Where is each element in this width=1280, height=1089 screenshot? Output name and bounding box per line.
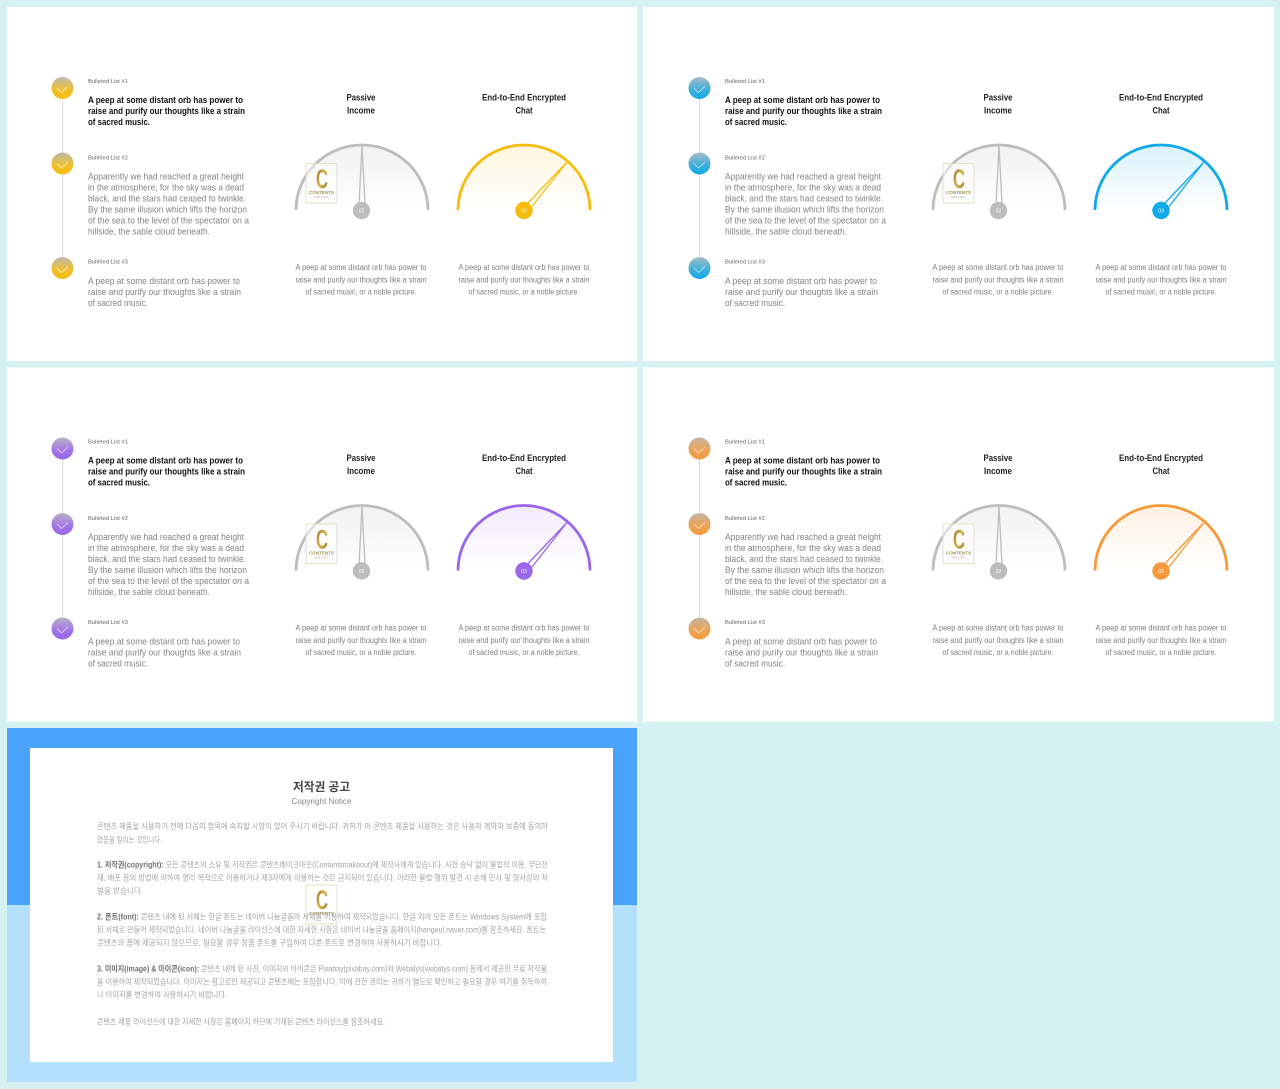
text block: bulleted list: black, and the stars had ceased to twinkle. bbox=[88, 194, 246, 204]
text block: bulleted list: Bulleted List #2 bbox=[88, 156, 128, 162]
gauge: passive income bbox=[296, 92, 428, 296]
text block: bulleted list: of sacred music. bbox=[88, 117, 150, 128]
timeline with three check bullets bbox=[52, 77, 74, 279]
gauge: passive income: of sacred music, or a noble picture. bbox=[942, 288, 1054, 296]
panel: orange slide bbox=[643, 368, 1274, 722]
text block: bulleted list: A peep at some distant orb has power to bbox=[88, 456, 243, 466]
text block: notice intro: 였음을 알리는 것입니다. bbox=[97, 834, 162, 844]
text block: font clause: 콘텐츠의 폼에 제공되지 않으므로, 필요할 경우 정품 폰트를 구입하여 다른 폰트로 변경하여 사용하시기 바랍니다. bbox=[97, 938, 442, 948]
text block: bulleted list: A peep at some distant orb has power to bbox=[725, 276, 877, 287]
gauge: passive income: 02 bbox=[359, 208, 364, 214]
text block: bulleted list: By the same illusion which lifts the horizon bbox=[88, 565, 247, 576]
gauge: passive income bbox=[932, 92, 1065, 296]
text block: font clause bbox=[97, 912, 548, 948]
gauge: passive income: A peep at some distant orb has power to bbox=[296, 263, 427, 272]
timeline with three check bullets bbox=[688, 77, 710, 279]
text block: bulleted list: Bulleted List #3 bbox=[725, 620, 765, 626]
text block: bulleted list: of sacred music. bbox=[88, 298, 148, 309]
text block: bulleted list bbox=[88, 440, 250, 670]
text block: bulleted list: of sacred music. bbox=[725, 117, 787, 128]
gauge: encrypted chat: raise and purify our thoughts like a strain bbox=[458, 636, 590, 645]
gauge: encrypted chat bbox=[458, 453, 590, 657]
text block: bulleted list: hillside, the sable cloud beneath. bbox=[88, 587, 210, 598]
text block: bulleted list bbox=[725, 440, 887, 670]
heading: copyright notice bbox=[292, 779, 352, 806]
gauge: passive income: of sacred music, or a noble picture. bbox=[306, 648, 416, 657]
text block: bulleted list: raise and purify our thoughts like a strain bbox=[725, 648, 878, 658]
text block: copyright clause: 재, 배포 등의 방법에 의하여 영리 목적으로 이용하거나 제3자에게 이용하는 것은 금지되어 있습니다. 이러한 불법 행위 발견 시 손해 민사 및 형사상의 처 bbox=[97, 872, 548, 882]
text block: bulleted list: black, and the stars had ceased to twinkle. bbox=[725, 554, 883, 565]
gauge: passive income: 02 bbox=[359, 569, 364, 575]
text block: bulleted list: in the atmosphere, for the sky was a dead bbox=[88, 182, 244, 194]
gauge: passive income: of sacred music, or a noble picture. bbox=[306, 288, 416, 296]
gauge: encrypted chat: of sacred music, or a noble picture. bbox=[1106, 288, 1216, 296]
icon: contents logo watermark: REAL COPY bbox=[314, 556, 329, 560]
heading: copyright notice: Copyright Notice bbox=[292, 796, 352, 806]
gauge: passive income bbox=[296, 453, 428, 657]
text block: bulleted list: A peep at some distant orb has power to bbox=[88, 276, 240, 287]
icon: contents logo watermark bbox=[943, 524, 974, 564]
text block: bulleted list: Bulleted List #1 bbox=[725, 79, 765, 85]
gauge: encrypted chat: of sacred music, or a noble picture. bbox=[468, 288, 580, 296]
icon: contents logo watermark: CONTENTS bbox=[946, 550, 971, 556]
text block: bulleted list: of sacred music. bbox=[725, 658, 785, 670]
gauge: encrypted chat: A peep at some distant orb has power to bbox=[458, 624, 590, 632]
gauge: passive income: raise and purify our thoughts like a strain bbox=[296, 636, 426, 645]
gauge: passive income: Income bbox=[347, 106, 375, 116]
icon: contents logo watermark: C bbox=[953, 164, 965, 194]
gauge: passive income: Income bbox=[984, 466, 1012, 476]
gauge: encrypted chat: raise and purify our thoughts like a strain bbox=[458, 276, 590, 284]
text block: bulleted list: in the atmosphere, for the sky was a dead bbox=[725, 543, 881, 554]
text block: image and icon clause: 3. 이미지(image) & 아이콘(icon): 콘텐츠 내에 된 사진, 이미지와 아이콘은 Pixabay(pixabay.com)와 Webalys(webalys.com) 등에서 제공한 무료 저작물 bbox=[97, 964, 547, 974]
text block: copyright clause: 1. 저작권(copyright): 모든 콘텐츠의 소유 및 저작권은 콘텐츠메이크아웃(Contentsmakeout)에 제작사에게 있습니다. 사전 승낙 없이 불법적 이용, 무단전 bbox=[97, 860, 548, 870]
text block: notice intro: 콘텐츠 제품을 사용하기 전에 다음의 항목에 숙지할 사항이 있어 주시기 바랍니다. 귀하가 이 콘텐츠 제품을 사용하는 것은 사용자 계약과 보증에 동의하 bbox=[97, 821, 549, 831]
text block: bulleted list: of sacred music. bbox=[88, 658, 148, 670]
text block: bulleted list: hillside, the sable cloud beneath. bbox=[725, 226, 847, 238]
gauge: passive income: raise and purify our thoughts like a strain bbox=[932, 276, 1064, 284]
text block: bulleted list: Bulleted List #2 bbox=[725, 516, 765, 522]
text block: bulleted list: in the atmosphere, for the sky was a dead bbox=[725, 182, 881, 194]
panel: blue slide bbox=[643, 7, 1274, 361]
text block: bulleted list: Apparently we had reached a great height bbox=[725, 532, 881, 543]
icon: contents logo watermark bbox=[306, 524, 337, 564]
gauge: encrypted chat: 03 bbox=[1158, 208, 1164, 214]
text block: bulleted list: raise and purify our thoughts like a strain bbox=[725, 466, 882, 478]
heading: copyright notice: 저작권 공고 bbox=[293, 779, 350, 794]
gauge: encrypted chat: End-to-End Encrypted bbox=[1119, 453, 1203, 463]
text block: bulleted list: of the sea to the level of the spectator on a bbox=[88, 216, 250, 226]
icon: contents logo watermark: CONTENTS bbox=[309, 911, 334, 916]
gauge: encrypted chat: A peep at some distant orb has power to bbox=[458, 263, 590, 272]
gauge: passive income: Income bbox=[347, 466, 375, 476]
text block: bulleted list: Apparently we had reached a great height bbox=[88, 172, 244, 182]
gauge: passive income: A peep at some distant orb has power to bbox=[932, 624, 1064, 632]
icon: contents logo watermark: CONTENTS bbox=[309, 550, 334, 556]
text block: bulleted list bbox=[88, 79, 250, 309]
text block: notice intro bbox=[97, 821, 549, 844]
text block: bulleted list bbox=[725, 79, 887, 309]
icon: contents logo watermark: C bbox=[316, 164, 328, 194]
text block: bulleted list: black, and the stars had ceased to twinkle. bbox=[88, 554, 246, 565]
text block: bulleted list: Apparently we had reached a great height bbox=[88, 532, 244, 543]
text block: bulleted list: A peep at some distant orb has power to bbox=[88, 95, 243, 106]
gauge: passive income: Passive bbox=[346, 92, 376, 102]
gauge: passive income: A peep at some distant orb has power to bbox=[296, 624, 427, 632]
text block: bulleted list: of sacred music. bbox=[725, 298, 785, 309]
gauge: encrypted chat: raise and purify our thoughts like a strain bbox=[1096, 636, 1226, 645]
text block: bulleted list: Bulleted List #2 bbox=[725, 156, 765, 162]
gauge: encrypted chat: Chat bbox=[516, 466, 533, 476]
timeline with three check bullets bbox=[52, 438, 74, 640]
text block: bulleted list: raise and purify our thoughts like a strain bbox=[88, 648, 241, 658]
text block: font clause: 된 서체로 만들어 제작되었습니다. 네이버 나눔글꼴 라이선스에 대한 자세한 사항은 네이버 나눔글꼴 홈페이지(hangeul.naver.com)를 참조하세요. 폰트는 bbox=[97, 924, 546, 934]
text block: bulleted list: of the sea to the level of the spectator on a bbox=[88, 576, 250, 587]
text block: bulleted list: raise and purify our thoughts like a strain bbox=[88, 287, 241, 298]
gauge: encrypted chat: End-to-End Encrypted bbox=[482, 453, 566, 463]
text block: bulleted list: A peep at some distant orb has power to bbox=[725, 456, 880, 466]
text block: bulleted list: By the same illusion which lifts the horizon bbox=[725, 204, 884, 216]
text block: bulleted list: Bulleted List #1 bbox=[88, 79, 128, 85]
text block: bulleted list: Bulleted List #1 bbox=[725, 440, 765, 446]
gauge: passive income: raise and purify our thoughts like a strain bbox=[296, 276, 426, 284]
icon: contents logo watermark: C bbox=[953, 524, 965, 554]
text block: bulleted list: Apparently we had reached a great height bbox=[725, 172, 881, 182]
gauge: encrypted chat: 03 bbox=[521, 569, 527, 575]
text block: bulleted list: hillside, the sable cloud beneath. bbox=[88, 226, 210, 238]
icon: contents logo watermark: REAL COPY bbox=[951, 556, 966, 560]
timeline with three check bullets bbox=[688, 438, 710, 640]
gauge: encrypted chat: 03 bbox=[1158, 569, 1164, 575]
text block: image and icon clause: 나 이미지를 변경하여 사용하시기 바랍니다. bbox=[97, 990, 227, 1000]
icon: contents logo watermark bbox=[306, 885, 337, 924]
text block: bulleted list: Bulleted List #1 bbox=[88, 440, 128, 446]
icon: contents logo watermark bbox=[943, 164, 974, 203]
text block: bulleted list: Bulleted List #3 bbox=[88, 620, 128, 626]
gauge: passive income: Passive bbox=[984, 92, 1012, 102]
icon: contents logo watermark: CONTENTS bbox=[946, 190, 971, 195]
text block: bulleted list: hillside, the sable cloud beneath. bbox=[725, 587, 847, 598]
gauge: passive income: A peep at some distant orb has power to bbox=[932, 263, 1064, 272]
text block: bulleted list: of the sea to the level of the spectator on a bbox=[725, 576, 887, 587]
text block: bulleted list: Bulleted List #3 bbox=[88, 260, 128, 266]
text block: bulleted list: in the atmosphere, for the sky was a dead bbox=[88, 543, 244, 554]
gauge: passive income: 02 bbox=[996, 569, 1001, 575]
text block: bulleted list: of sacred music. bbox=[725, 478, 787, 488]
gauge: encrypted chat: of sacred music, or a noble picture. bbox=[468, 648, 580, 657]
text block: bulleted list: Bulleted List #3 bbox=[725, 260, 765, 266]
icon: contents logo watermark: CONTENTS bbox=[309, 190, 334, 195]
text block: license footer: 콘텐츠 제품 라이선스에 대한 자세한 사항은 홈페이지 하단에 기재된 콘텐츠 라이선스를 참조하세요. bbox=[97, 1016, 385, 1026]
text block: bulleted list: By the same illusion which lifts the horizon bbox=[88, 204, 247, 216]
gauge: passive income: 02 bbox=[996, 208, 1001, 214]
text block: bulleted list: of the sea to the level of the spectator on a bbox=[725, 216, 887, 226]
text block: image and icon clause: 을 이용하여 제작되었습니다. 이미지는 참고로만 제공되고 콘텐츠에는 포함합니다. 이에 관한 권리는 귀하가 별도로 확인하고 필요할 경우 여기를 취득하여 bbox=[97, 976, 547, 986]
gauge: encrypted chat: Chat bbox=[1152, 466, 1170, 476]
panel: purple slide bbox=[7, 368, 637, 722]
text block: bulleted list: raise and purify our thoughts like a strain bbox=[725, 106, 882, 117]
gauge: encrypted chat bbox=[458, 92, 590, 296]
gauge: encrypted chat: 03 bbox=[521, 208, 527, 214]
text block: bulleted list: A peep at some distant orb has power to bbox=[725, 95, 880, 106]
text block: bulleted list: raise and purify our thoughts like a strain bbox=[88, 466, 245, 478]
icon: contents logo watermark: REAL COPY bbox=[951, 196, 966, 199]
text block: copyright clause: 벌을 받습니다. bbox=[97, 886, 143, 896]
gauge: encrypted chat bbox=[1095, 453, 1227, 657]
text block: bulleted list: A peep at some distant orb has power to bbox=[88, 636, 240, 648]
text block: image and icon clause bbox=[97, 964, 547, 1000]
gauge: encrypted chat: Chat bbox=[516, 106, 533, 116]
text block: copyright clause bbox=[97, 860, 548, 896]
gauge: passive income: raise and purify our thoughts like a strain bbox=[932, 636, 1064, 645]
gauge: passive income: of sacred music, or a noble picture. bbox=[942, 648, 1054, 657]
text block: bulleted list: Bulleted List #2 bbox=[88, 516, 128, 522]
gauge: encrypted chat: End-to-End Encrypted bbox=[1119, 92, 1203, 102]
icon: contents logo watermark: REAL COPY bbox=[314, 196, 329, 199]
text block: bulleted list: A peep at some distant orb has power to bbox=[725, 636, 877, 648]
gauge: encrypted chat bbox=[1095, 92, 1227, 296]
gauge: passive income: Passive bbox=[346, 453, 376, 463]
icon: contents logo watermark: C bbox=[316, 524, 328, 554]
gauge: passive income bbox=[932, 453, 1065, 657]
gauge: encrypted chat: End-to-End Encrypted bbox=[482, 92, 566, 102]
text block: bulleted list: black, and the stars had ceased to twinkle. bbox=[725, 194, 883, 204]
panel: copyright notice bbox=[7, 728, 637, 1082]
gauge: encrypted chat: A peep at some distant orb has power to bbox=[1096, 624, 1227, 632]
gauge: encrypted chat: raise and purify our thoughts like a strain bbox=[1096, 276, 1226, 284]
text block: bulleted list: raise and purify our thoughts like a strain bbox=[88, 106, 245, 117]
icon: contents logo watermark: C bbox=[316, 885, 328, 915]
text block: bulleted list: By the same illusion which lifts the horizon bbox=[725, 565, 884, 576]
text block: bulleted list: raise and purify our thoughts like a strain bbox=[725, 287, 878, 298]
panel: yellow slide bbox=[7, 7, 637, 361]
icon: contents logo watermark bbox=[306, 164, 337, 203]
text block: bulleted list: of sacred music. bbox=[88, 478, 150, 488]
gauge: encrypted chat: Chat bbox=[1152, 106, 1170, 116]
text block: font clause: 2. 폰트(font): 콘텐츠 내에 된 서체는 한글 폰트는 네이버 나눔글꼴의 서체를 이용하여 제작되었습니다. 한글 외의 모든 폰트는 Windows System에 포함 bbox=[97, 912, 548, 922]
gauge: encrypted chat: A peep at some distant orb has power to bbox=[1096, 263, 1227, 272]
gauge: encrypted chat: of sacred music, or a noble picture. bbox=[1106, 648, 1216, 657]
gauge: passive income: Income bbox=[984, 106, 1012, 116]
gauge: passive income: Passive bbox=[984, 453, 1012, 463]
